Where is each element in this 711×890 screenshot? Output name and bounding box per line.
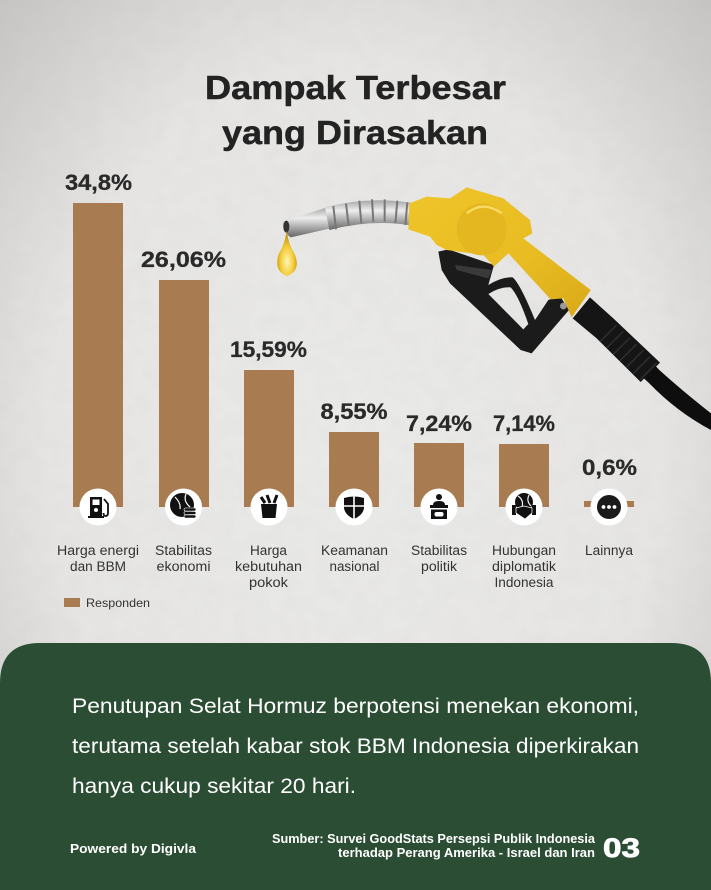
title: yang Dirasakan: [222, 114, 488, 151]
bar: Hubungan diplomatik Indonesia: diplomatik: [492, 559, 556, 574]
bar: Stabilitas ekonomi: ekonomi: [156, 559, 210, 574]
oil drop: [277, 231, 297, 276]
source note: terhadap Perang Amerika - Israel dan Iran: [338, 845, 595, 860]
source note: [272, 831, 596, 860]
panel: green conclusion: [0, 643, 711, 890]
bar: Hubungan diplomatik Indonesia: [492, 411, 556, 590]
source note: Sumber: Survei GoodStats Persepsi Publik Indonesia: [272, 831, 596, 846]
bar: Harga kebutuhan pokok: Harga: [250, 543, 287, 558]
bar: Harga energi dan BBM: 34,8%: [65, 170, 132, 195]
title: Dampak Terbesar: [205, 69, 506, 106]
bar: Harga kebutuhan pokok: [230, 337, 307, 590]
bar: Keamanan nasional: nasional: [330, 559, 380, 574]
bar: Hubungan diplomatik Indonesia: Indonesia: [494, 575, 554, 590]
spout: [283, 207, 329, 237]
bar: Stabilitas ekonomi: [141, 247, 226, 574]
bar: Stabilitas politik: Stabilitas: [411, 543, 467, 558]
bar: Stabilitas ekonomi: Stabilitas: [155, 543, 212, 558]
title: [205, 69, 506, 151]
bar: Stabilitas ekonomi: 26,06%: [141, 247, 226, 272]
bar: Harga energi dan BBM: Harga energi: [57, 543, 139, 558]
hose grip ribs: [600, 325, 657, 380]
conclusion text: [72, 695, 639, 798]
illustration: fuel nozzle with oil drop: [277, 187, 711, 430]
conclusion text: terutama setelah kabar stok BBM Indonesia diperkirakan: [72, 735, 639, 758]
bar: Stabilitas politik: [406, 411, 472, 574]
bar: Harga energi dan BBM: [57, 170, 139, 574]
bar: Hubungan diplomatik Indonesia: Hubungan: [492, 543, 556, 558]
conclusion text: Penutupan Selat Hormuz berpotensi menekan ekonomi,: [72, 695, 639, 718]
bar: Harga kebutuhan pokok: kebutuhan: [235, 559, 302, 574]
conclusion text: hanya cukup sekitar 20 hari.: [72, 775, 356, 798]
bar: Harga kebutuhan pokok: pokok: [249, 575, 288, 590]
bar: Stabilitas politik: politik: [421, 559, 457, 574]
hose sleeve: [573, 297, 660, 382]
bar: Lainnya: Lainnya: [585, 543, 633, 558]
bar: Harga kebutuhan pokok: 15,59%: [230, 337, 307, 362]
bar: Lainnya: [582, 455, 637, 558]
bar: Hubungan diplomatik Indonesia: 7,14%: [493, 411, 555, 436]
corrugated neck: [325, 200, 416, 230]
page number: 03: [603, 833, 640, 863]
bar: Harga energi dan BBM: dan BBM: [70, 559, 126, 574]
bar: Stabilitas politik: 7,24%: [406, 411, 472, 436]
bar chart: respondents by impact: [57, 170, 637, 590]
legend: Responden: Responden: [86, 596, 150, 610]
bar: Keamanan nasional: [320, 399, 388, 574]
pivot screw: [560, 303, 567, 309]
hose: [638, 360, 711, 430]
bar: Keamanan nasional: 8,55%: [320, 399, 388, 424]
bar: Keamanan nasional: Keamanan: [321, 543, 388, 558]
yellow body: [408, 187, 591, 317]
credit: Powered by Digivla: Powered by Digivla: [70, 841, 197, 856]
black guard and trigger: [438, 249, 569, 353]
bar: Lainnya: 0,6%: [582, 455, 637, 480]
